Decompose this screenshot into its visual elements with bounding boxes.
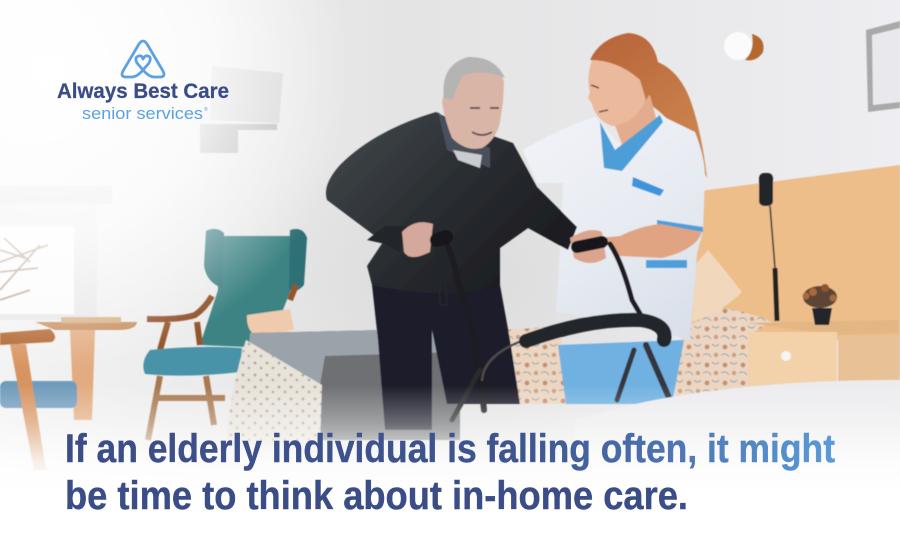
floral bed skirt behind man	[505, 326, 570, 404]
hand on right grip	[570, 230, 606, 263]
registered mark: ®	[204, 106, 208, 113]
collar	[438, 112, 490, 168]
floral cloth	[226, 340, 322, 445]
potted plant	[802, 284, 837, 325]
wall lamp	[724, 32, 764, 60]
lower pocket stripe	[646, 260, 687, 268]
nurse eye and mouth	[591, 85, 608, 112]
sleeve stripe	[657, 220, 703, 232]
nurse	[513, 33, 707, 404]
bed control remote and cable	[759, 173, 777, 321]
pocket stripe	[632, 177, 664, 196]
hair	[444, 57, 505, 100]
sweater	[326, 112, 577, 293]
elderly man	[326, 57, 606, 430]
trousers	[372, 285, 520, 430]
nurse hand on arm	[513, 198, 543, 227]
nightstand	[747, 320, 900, 390]
sweater cuff	[367, 226, 408, 252]
hand on walker	[402, 222, 433, 257]
foreground bed sheet	[560, 380, 900, 550]
nurse tunic	[523, 115, 705, 340]
foreground table and blue seat	[0, 329, 77, 470]
logo icon: heart knot triangle	[122, 41, 164, 77]
headline	[65, 427, 835, 518]
nurse scrubs trousers	[558, 340, 684, 404]
nurse ponytail	[645, 60, 707, 178]
pillow	[692, 250, 742, 322]
head	[442, 58, 504, 149]
nurse neck	[610, 95, 656, 152]
round side table	[35, 317, 137, 420]
floral bedding	[675, 308, 772, 398]
headboard	[690, 165, 900, 340]
teal armchair	[143, 229, 307, 440]
window with frame	[0, 186, 112, 320]
logo wordmark: Always Best Care	[57, 79, 229, 103]
nurse hair	[590, 33, 658, 100]
towel on armrest	[247, 309, 294, 336]
eyes	[470, 108, 499, 135]
wall monitor	[200, 66, 283, 153]
picture frame	[866, 21, 900, 112]
logo	[57, 41, 229, 123]
walker	[437, 237, 670, 420]
headline line two: be time to think about in-home care.	[65, 474, 688, 518]
nurse forearm	[600, 224, 702, 258]
logo tagline: senior services	[82, 104, 203, 123]
bed blanket grey	[250, 330, 460, 440]
nurse v-collar	[600, 115, 663, 171]
nurse face	[588, 55, 648, 126]
